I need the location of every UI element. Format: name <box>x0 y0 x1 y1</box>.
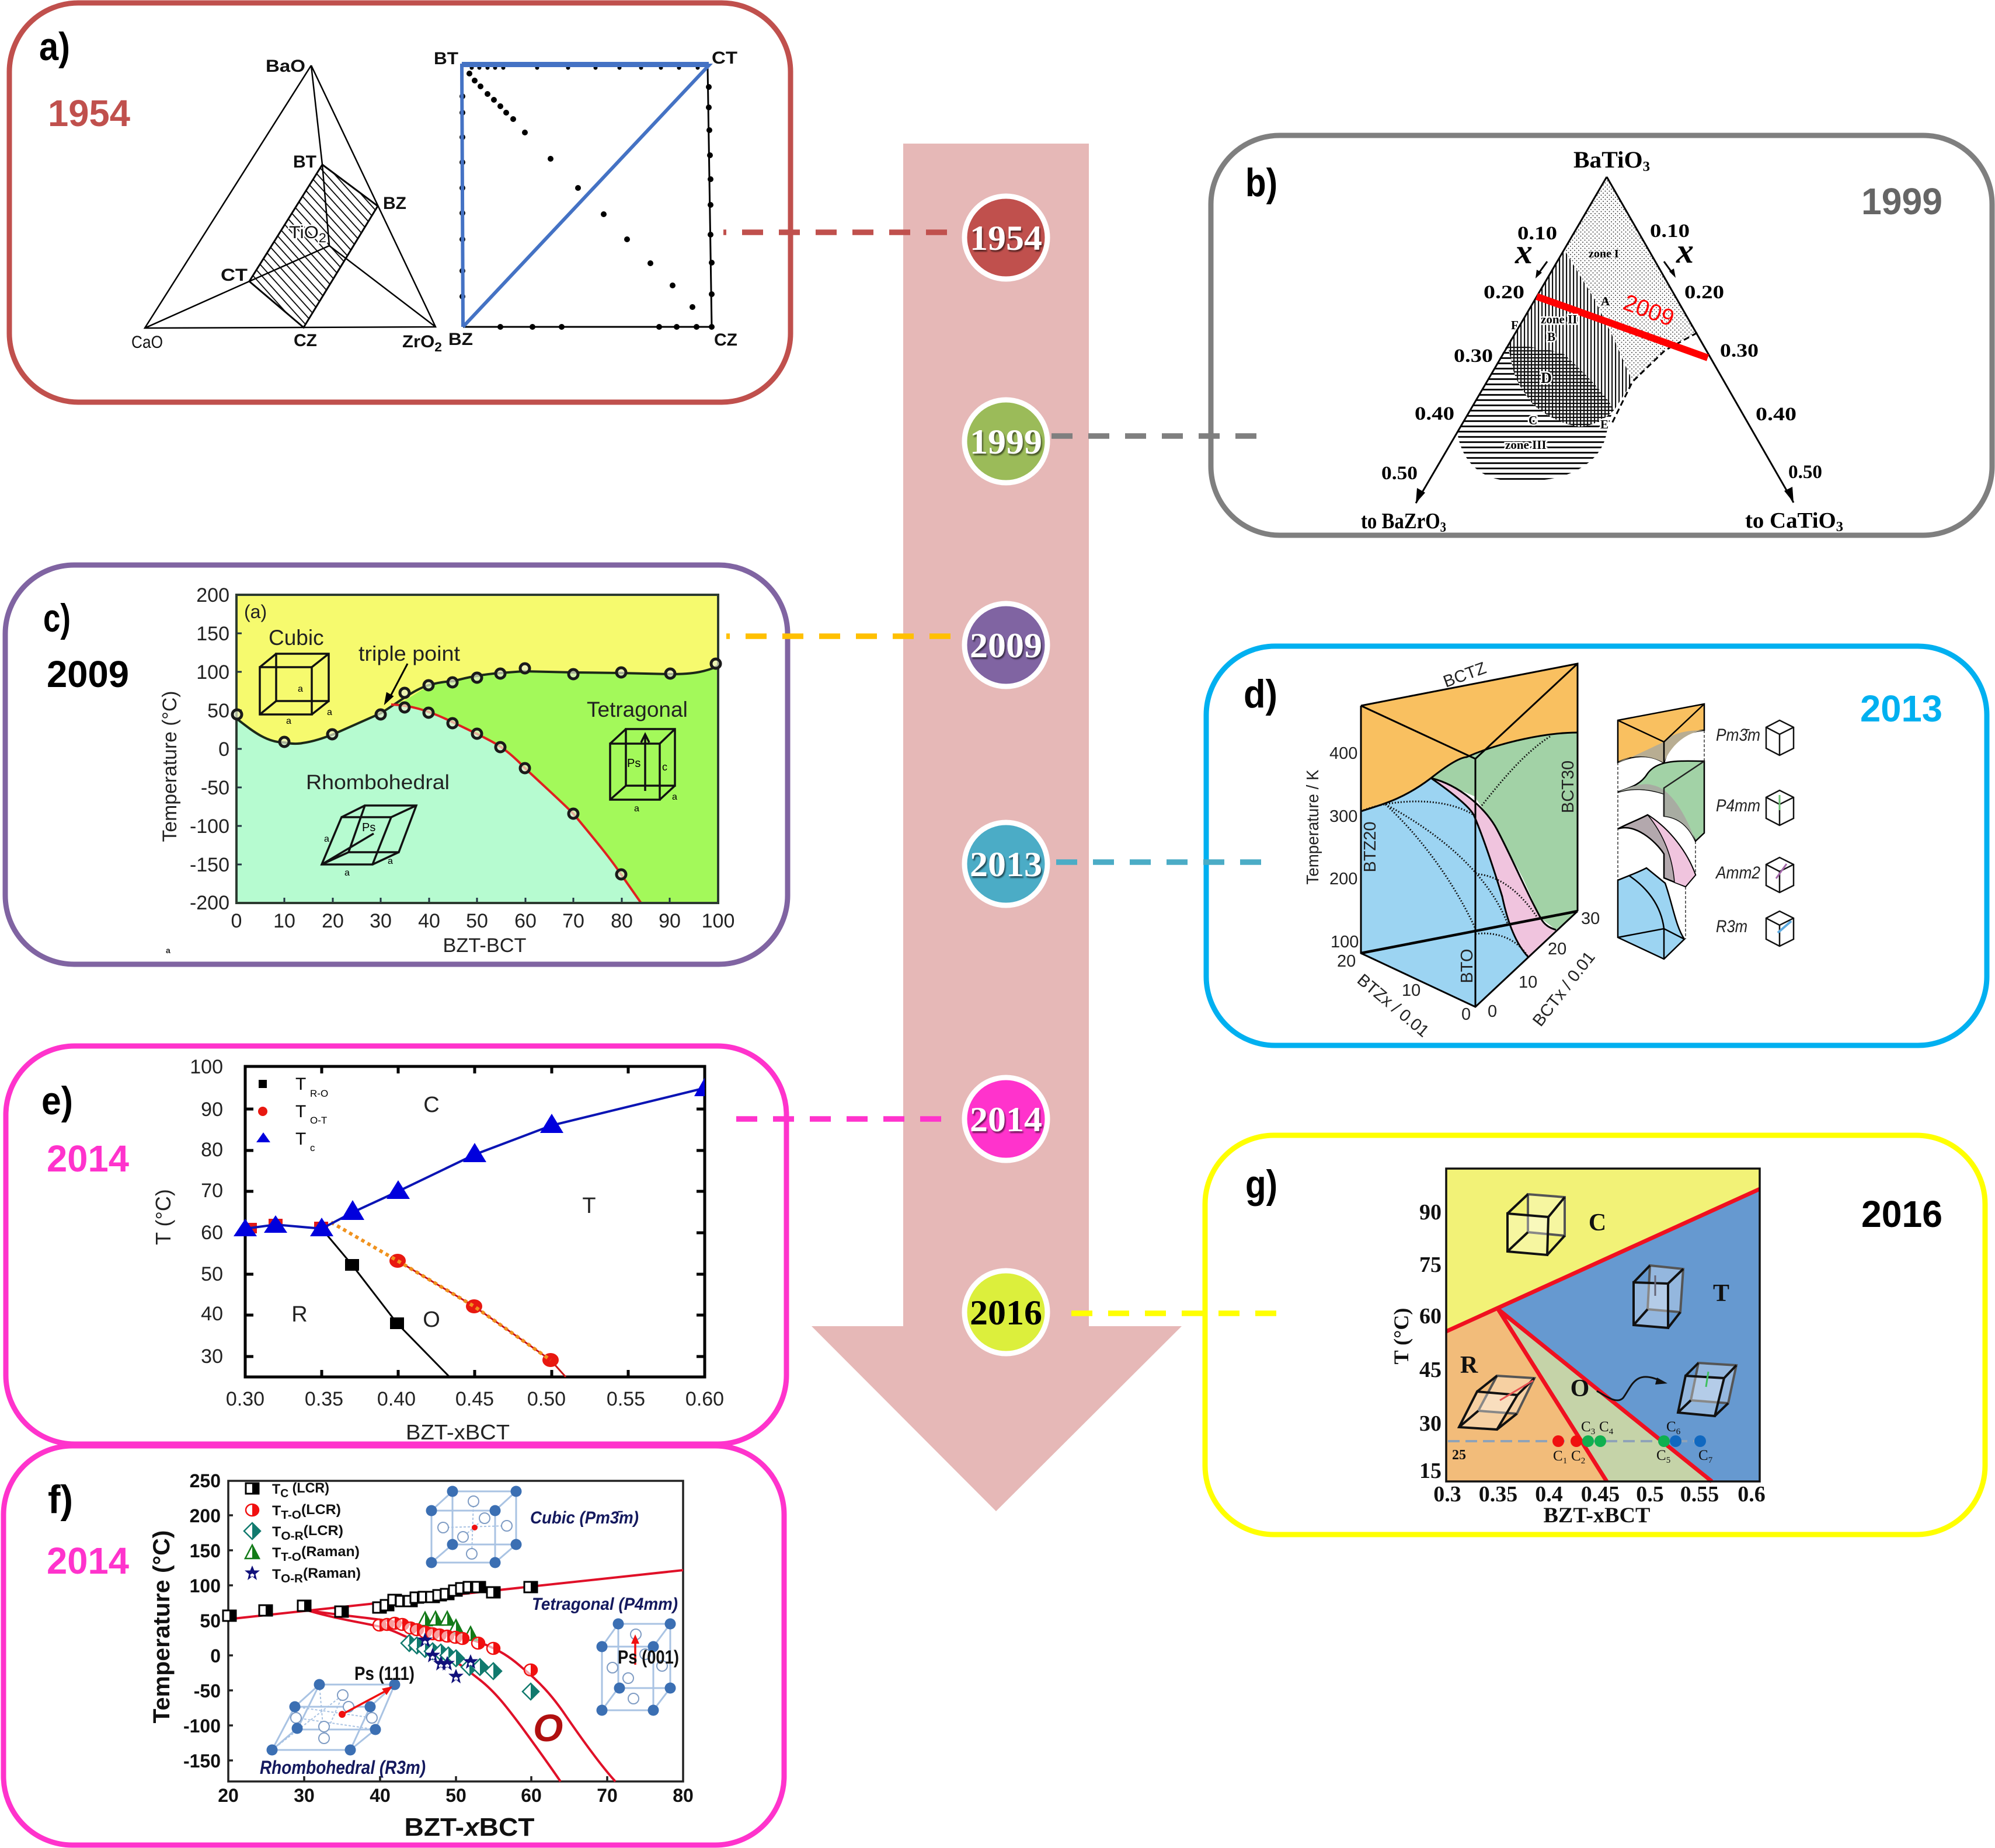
phase regions chart <box>1390 1169 1766 1528</box>
phase symbols: Pm3̄m <box>1716 726 1760 745</box>
unit cell: orthorhombic <box>1678 1363 1736 1416</box>
axis labels: 75 <box>1419 1253 1442 1277</box>
T-O Raman markers <box>418 1612 478 1640</box>
data points <box>232 659 720 879</box>
axis labels: 150 <box>190 1540 221 1561</box>
curved arrow to O cell <box>1597 1377 1661 1400</box>
phase labels: a <box>166 946 170 955</box>
zone labels: zone III <box>1505 438 1547 452</box>
unit cell: cubic: a <box>298 684 303 694</box>
data markers <box>234 1078 705 1367</box>
25 degree composition line: C <box>1553 1448 1563 1464</box>
unit cell: tetragonal: Ps <box>627 757 640 770</box>
axis labels: 200 <box>196 584 229 606</box>
panel g label: g) <box>1245 1162 1277 1207</box>
3D axis labels: BTO <box>1458 949 1477 984</box>
axis labels: 0.50 <box>527 1388 566 1410</box>
timeline node 1999 <box>965 400 1047 483</box>
zone labels: B <box>1547 330 1555 344</box>
axis labels: 70 <box>562 910 584 932</box>
ternary zones diagram <box>1361 147 1843 535</box>
ternary axis labels: 0.20 <box>1684 282 1724 303</box>
unit cell: tetragonal: a <box>634 804 639 814</box>
timeline node 1954: 1954 <box>970 219 1042 257</box>
unit cell: tetragonal <box>1634 1265 1683 1328</box>
axis labels: 50 <box>445 1785 466 1806</box>
25 degree composition line: 6 <box>1676 1427 1681 1436</box>
phase labels: Tetragonal (P4mm) <box>532 1595 678 1614</box>
Tc LCR markers <box>223 1582 537 1621</box>
axis labels: 30 <box>370 910 392 932</box>
panel f year: 2014 <box>47 1540 129 1582</box>
axis labels: 30 <box>201 1345 223 1368</box>
ternary axis labels: 3 <box>1440 520 1446 535</box>
legend: T <box>272 1524 281 1540</box>
axis labels: -50 <box>201 777 229 799</box>
axis labels: 80 <box>201 1139 223 1161</box>
panel d: 2013 <box>1206 646 1987 1045</box>
panel d year: 2013 <box>1860 688 1942 730</box>
unit cell: tetragonal <box>597 1618 676 1716</box>
timeline node 2016: 2016 <box>970 1293 1042 1332</box>
axis labels: 0.6 <box>1738 1482 1766 1507</box>
phase labels: Tetragonal <box>587 698 688 721</box>
25 degree composition line <box>1448 1419 1713 1466</box>
25 degree composition line: C <box>1656 1448 1666 1463</box>
legend: C <box>280 1487 288 1500</box>
25 degree composition line: C <box>1581 1419 1591 1435</box>
axis labels: -50 <box>194 1680 221 1701</box>
tetrahedron labels: TiO <box>289 223 316 242</box>
axis labels: 250 <box>190 1470 221 1491</box>
legend: (LCR) <box>301 1502 341 1518</box>
timeline node 2014: 2014 <box>970 1100 1042 1139</box>
connector 2016 <box>1071 1310 1276 1316</box>
legend <box>244 1480 361 1585</box>
ternary axis labels: 3 <box>1836 519 1843 535</box>
connector 1999 <box>1052 433 1257 439</box>
axis labels: Temperature (°C) <box>149 1530 175 1723</box>
tetrahedron labels: ZrO <box>402 332 433 351</box>
zone labels: A <box>1601 294 1610 308</box>
axis labels: 100 <box>702 910 734 932</box>
25 degree composition line: 25 <box>1452 1448 1466 1463</box>
phase letters: C <box>1589 1209 1606 1236</box>
unit cell: rhombohedral: a <box>344 868 350 878</box>
axis labels <box>159 584 734 957</box>
mini unit cells <box>1766 720 1794 946</box>
panel b: 1999 <box>1211 135 1992 535</box>
ternary axis labels: 0.40 <box>1415 403 1454 424</box>
3D axis labels: 20 <box>1337 952 1356 971</box>
panel a label: a) <box>39 25 70 69</box>
phase labels: Ps (111) <box>354 1663 415 1684</box>
panel c year: 2009 <box>47 653 129 695</box>
unit cell: cubic <box>426 1486 522 1568</box>
3D axis labels: BTZx / 0.01 <box>1353 971 1432 1041</box>
axis labels: 0.55 <box>1680 1482 1719 1507</box>
phase labels: triple point <box>358 641 460 665</box>
3D axis labels: 100 <box>1331 933 1359 951</box>
axis labels: 60 <box>514 910 537 932</box>
axis labels: 15 <box>1419 1459 1442 1483</box>
3D axis labels: Temperature / K <box>1304 769 1322 885</box>
axis labels: 0 <box>210 1645 221 1666</box>
axis labels: 30 <box>294 1785 315 1806</box>
legend: (LCR) <box>304 1523 343 1539</box>
timeline node 1954 <box>965 196 1047 279</box>
connector 1954 <box>723 229 947 235</box>
3D axis labels: 200 <box>1329 870 1357 888</box>
axis labels: -100 <box>183 1715 221 1737</box>
25 degree composition line: 7 <box>1708 1456 1713 1465</box>
axis labels: 70 <box>597 1785 618 1806</box>
3D axis labels: BCTx / 0.01 <box>1529 948 1599 1030</box>
axis labels: 45 <box>1419 1358 1442 1382</box>
axis labels: 0.3 <box>1433 1482 1461 1507</box>
panel b year: 1999 <box>1861 180 1942 222</box>
legend: O-R <box>281 1530 304 1543</box>
ternary axis labels: BaTiO <box>1573 147 1641 173</box>
axis labels: 90 <box>659 910 681 932</box>
square labels: BZ <box>448 330 473 349</box>
phase labels: Cubic (Pm3̄m) <box>530 1508 639 1528</box>
legend: O-R <box>281 1572 304 1585</box>
axis labels: 100 <box>190 1575 221 1596</box>
zone labels <box>1505 247 1619 452</box>
zone labels: zone I <box>1589 247 1619 260</box>
zone labels: D <box>1541 369 1552 386</box>
zone labels: E <box>1600 417 1608 431</box>
axis labels: 20 <box>322 910 344 932</box>
zone labels: C <box>1529 413 1537 427</box>
unit cell: cubic <box>1507 1194 1565 1255</box>
tetrahedron labels: BZ <box>383 194 406 213</box>
3D phase diagram <box>1304 659 1600 1041</box>
axis labels: 0.5 <box>1636 1482 1664 1507</box>
timeline node 1999: 1999 <box>970 423 1042 461</box>
ternary axis labels <box>1361 147 1843 535</box>
ternary axis labels: 0.50 <box>1381 463 1418 484</box>
axis labels <box>1390 1200 1766 1528</box>
axis labels: 0.35 <box>1479 1482 1517 1507</box>
legend: O-T <box>310 1115 327 1126</box>
timeline node 2009 <box>965 604 1047 686</box>
legend: T <box>272 1567 281 1582</box>
phase letters <box>291 1093 596 1332</box>
3D axis labels <box>1304 659 1600 1041</box>
panel e label: e) <box>41 1079 73 1123</box>
ternary axis labels: x <box>1676 232 1694 270</box>
panel c label: c) <box>43 596 71 640</box>
25 degree composition line: C <box>1599 1419 1609 1435</box>
tetrahedron diagram <box>131 57 442 354</box>
axis labels: 90 <box>201 1099 223 1121</box>
25 degree composition line: C <box>1698 1448 1708 1463</box>
ternary axis labels: 0.10 <box>1517 223 1557 244</box>
phase labels: Rhombohedral (R3m) <box>260 1757 426 1778</box>
triple point arrow <box>385 664 408 703</box>
25 degree composition line: 3 <box>1591 1427 1595 1436</box>
tetrahedron labels: CaO <box>131 333 163 352</box>
timeline node 2016 <box>965 1271 1047 1354</box>
ternary axis labels: x <box>1514 232 1533 271</box>
tetrahedron labels <box>131 57 442 354</box>
panel a year: 1954 <box>48 92 130 134</box>
3D axis labels: 300 <box>1329 807 1357 826</box>
axis labels <box>149 1470 694 1842</box>
ternary axis labels: 0.20 <box>1484 282 1524 303</box>
axis labels: 80 <box>673 1785 694 1806</box>
axis labels: T (°C) <box>1390 1308 1413 1364</box>
square labels <box>434 48 737 350</box>
axis labels: 0 <box>231 910 242 932</box>
phase labels: (a) <box>244 601 267 622</box>
ternary axis labels: 0.30 <box>1454 346 1493 367</box>
25 degree composition line: 2 <box>1581 1456 1585 1466</box>
3D axis labels: 0 <box>1461 1005 1471 1024</box>
phase letters: O <box>1571 1375 1589 1402</box>
panel e year: 2014 <box>47 1138 129 1180</box>
axis labels: 0.60 <box>685 1388 724 1410</box>
multi-series phase chart <box>149 1470 694 1842</box>
25 degree composition line: C <box>1571 1448 1581 1464</box>
connector 2013 <box>1056 859 1262 865</box>
3D axis labels: 30 <box>1581 909 1600 928</box>
ternary axis labels: to BaZrO <box>1361 509 1453 534</box>
panel f: 2014 <box>4 1446 784 1845</box>
legend: T <box>295 1075 306 1094</box>
axis labels: 10 <box>273 910 295 932</box>
tetrahedron labels: CZ <box>294 331 317 350</box>
axis labels: BZT-xBCT <box>1544 1504 1651 1528</box>
legend: (Raman) <box>303 1565 361 1581</box>
axis labels: T (°C) <box>151 1189 175 1245</box>
unit cell: rhombohedral: a <box>324 834 329 844</box>
axis labels: 100 <box>190 1056 223 1078</box>
unit cell: cubic: a <box>286 716 291 726</box>
O-R LCR markers <box>401 1635 539 1700</box>
axis labels: BZT-xBCT <box>404 1813 535 1842</box>
unit cell: rhombohedral: a <box>388 856 393 866</box>
legend: T <box>295 1129 306 1149</box>
axis labels: 30 <box>1419 1411 1442 1436</box>
timeline node 2013: 2013 <box>970 845 1042 884</box>
phase symbols: P4mm <box>1716 796 1760 815</box>
3D axis labels: BCTZ <box>1441 659 1489 692</box>
connector 2014 <box>736 1116 941 1122</box>
axis labels: 40 <box>201 1303 223 1325</box>
legend: T <box>272 1545 281 1561</box>
axis labels: 0.4 <box>1535 1482 1563 1507</box>
legend <box>256 1075 328 1153</box>
3D axis labels: BCT30 <box>1559 761 1578 813</box>
legend: R-O <box>310 1088 328 1099</box>
axis labels: 0.55 <box>607 1388 645 1410</box>
axis labels: 40 <box>418 910 440 932</box>
axis labels: 60 <box>521 1785 542 1806</box>
axis labels: 150 <box>196 623 229 645</box>
axis labels: 70 <box>201 1180 223 1202</box>
axis labels: 90 <box>1419 1200 1442 1225</box>
phase letters <box>1460 1209 1729 1402</box>
panel c: 2009 <box>5 565 788 964</box>
panel a: 1954 <box>9 3 791 402</box>
tetrahedron labels: BaO <box>266 57 305 76</box>
phase symbols <box>1715 726 1760 936</box>
zone labels: zone II <box>1541 312 1577 326</box>
axis labels: 100 <box>196 661 229 684</box>
axis labels: -200 <box>190 892 229 914</box>
phase labels: Cubic <box>269 626 324 650</box>
unit cell: tetragonal: a <box>672 792 677 802</box>
timeline node 2014 <box>965 1078 1047 1160</box>
axis labels: -150 <box>183 1751 221 1772</box>
panel g: 2016 <box>1205 1135 1985 1535</box>
fit curves <box>228 1570 683 1781</box>
phase diagram BZT-BCT <box>159 584 734 957</box>
legend: T <box>295 1102 306 1121</box>
axis labels: -100 <box>190 815 229 838</box>
unit cell: rhombohedral: Ps <box>362 821 375 834</box>
timeline node 2013 <box>965 822 1047 905</box>
3D axis labels: BTZ20 <box>1361 821 1380 873</box>
T-O LCR markers <box>373 1617 537 1676</box>
axis labels: 0.45 <box>455 1388 494 1410</box>
axis labels: 50 <box>207 700 229 722</box>
axis labels: BZT-xBCT <box>406 1420 510 1444</box>
legend: (LCR) <box>288 1480 329 1496</box>
axis labels: 200 <box>190 1505 221 1526</box>
phase letters: C <box>423 1093 440 1117</box>
axis labels: 50 <box>200 1610 221 1631</box>
phase labels: Ps (001) <box>618 1647 679 1668</box>
exploded phase pieces <box>1618 704 1704 959</box>
scatter phase chart <box>151 1056 724 1444</box>
phase labels: Rhombohedral <box>306 771 450 794</box>
axis labels <box>151 1056 724 1444</box>
3D axis labels: 10 <box>1519 973 1537 992</box>
unit cell: tetragonal <box>610 729 677 814</box>
legend: T-O <box>281 1509 301 1522</box>
axis labels: 80 <box>611 910 633 932</box>
O-R Raman markers <box>417 1633 478 1683</box>
legend: T-O <box>281 1551 301 1564</box>
phase symbols: Amm2 <box>1715 863 1760 883</box>
panel g year: 2016 <box>1861 1193 1942 1235</box>
axis labels: 20 <box>218 1785 239 1806</box>
timeline arrow <box>812 144 1182 1511</box>
panel d label: d) <box>1244 672 1277 716</box>
legend: c <box>310 1142 315 1153</box>
3D axis labels: 0 <box>1488 1002 1497 1021</box>
unit cell: rhombohedral <box>322 806 416 878</box>
legend: T <box>272 1481 281 1497</box>
axis labels: Temperature (°C) <box>159 691 181 842</box>
tetrahedron labels: 2 <box>434 340 442 354</box>
ternary axis labels: 0.30 <box>1720 340 1759 361</box>
phase labels: O <box>533 1706 563 1749</box>
square labels: BT <box>434 49 458 68</box>
phase letters: R <box>1460 1352 1478 1379</box>
panel e: 2014 <box>6 1046 786 1444</box>
phase letters: T <box>582 1194 596 1218</box>
panel b label: b) <box>1245 161 1277 205</box>
unit cell: cubic: a <box>327 707 332 717</box>
phase symbols: R3m <box>1716 917 1747 936</box>
phase labels <box>166 601 688 955</box>
axis labels: 0.40 <box>377 1388 416 1410</box>
square labels: CZ <box>714 330 737 350</box>
25 degree composition line: C <box>1666 1419 1676 1435</box>
ternary axis labels: to CaTiO <box>1745 508 1834 533</box>
phase letters: R <box>291 1302 308 1327</box>
2009 annotation: 2009 <box>1620 290 1677 332</box>
legend: T <box>272 1503 281 1519</box>
legend: (Raman) <box>301 1544 360 1560</box>
tetrahedron labels: BT <box>293 152 316 172</box>
square labels: CT <box>712 48 737 68</box>
zone labels: F <box>1511 318 1519 332</box>
ternary axis labels: 0.40 <box>1756 404 1796 425</box>
panel f label: f) <box>48 1477 73 1522</box>
axis labels: 0 <box>218 738 229 761</box>
3D axis labels: 20 <box>1548 940 1566 958</box>
3D axis labels: 400 <box>1329 744 1357 763</box>
phase letters: O <box>423 1307 440 1332</box>
connector 2009 <box>726 633 951 639</box>
phase letters: T <box>1713 1280 1729 1307</box>
axis labels: BZT-BCT <box>443 935 527 957</box>
unit cell: cubic <box>260 654 332 726</box>
axis labels: 60 <box>201 1222 223 1244</box>
axis labels: 0.45 <box>1581 1482 1620 1507</box>
phase labels <box>260 1508 679 1778</box>
axis labels: -150 <box>190 854 229 876</box>
unit cell: tetragonal: c <box>662 761 667 773</box>
axis labels: 0.35 <box>305 1388 343 1410</box>
25 degree composition line: 5 <box>1666 1456 1670 1465</box>
tetrahedron labels: CT <box>221 266 248 285</box>
unit cell: rhombohedral <box>1459 1376 1534 1429</box>
ternary axis labels: 0.10 <box>1650 221 1690 242</box>
axis labels: 60 <box>1419 1304 1442 1329</box>
timeline node 2009: 2009 <box>970 626 1042 665</box>
ternary axis labels: 3 <box>1643 159 1650 175</box>
composition square diagram <box>434 48 737 350</box>
3D axis labels: 10 <box>1402 981 1420 1000</box>
ternary axis labels: 0.50 <box>1788 462 1822 483</box>
axis labels: 50 <box>466 910 488 932</box>
axis labels: 50 <box>201 1263 223 1285</box>
unit cell: rhombohedral <box>266 1679 401 1756</box>
axis labels: 0.30 <box>226 1388 264 1410</box>
axis labels: 40 <box>370 1785 391 1806</box>
tetrahedron labels: 2 <box>319 231 326 245</box>
25 degree composition line: 1 <box>1563 1456 1567 1466</box>
25 degree composition line: 4 <box>1609 1427 1614 1436</box>
